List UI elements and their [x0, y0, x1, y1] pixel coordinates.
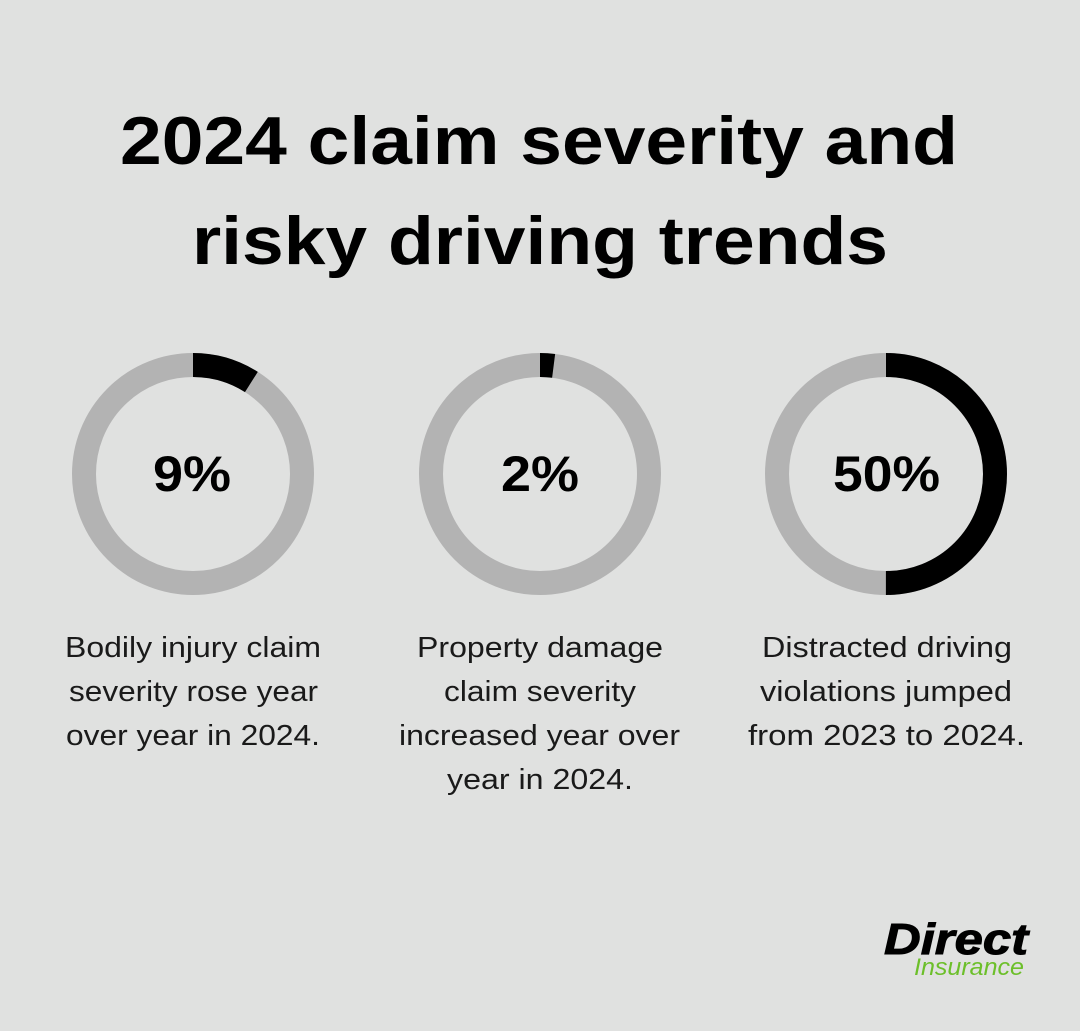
caption: violations jumped: [760, 676, 1012, 708]
caption: claim severity: [444, 676, 637, 708]
caption: [748, 632, 1025, 752]
title: [120, 103, 958, 279]
donut: 9%: 9%: [153, 446, 231, 502]
donut: 9%: [84, 365, 302, 583]
caption: over year in 2024.: [66, 720, 320, 752]
panel: distracted driving: [748, 365, 1025, 752]
panel: bodily injury: [65, 365, 321, 752]
title: risky driving trends: [192, 203, 888, 279]
donut: 50%: 50%: [833, 446, 940, 502]
donut: 2%: [431, 365, 649, 583]
logo: Direct Insurance: Direct: [884, 915, 1031, 964]
logo: Direct Insurance: Insurance: [914, 954, 1024, 981]
caption: Bodily injury claim: [65, 632, 321, 664]
caption: Distracted driving: [762, 632, 1012, 664]
caption: [65, 632, 321, 752]
donut: 2%: 2%: [501, 446, 579, 502]
caption: increased year over: [399, 720, 680, 752]
panel: property damage: [399, 365, 680, 796]
donut: 50%: [777, 365, 995, 583]
title: 2024 claim severity and: [120, 103, 958, 179]
logo: Direct Insurance: [884, 915, 1031, 981]
caption: year in 2024.: [447, 764, 633, 796]
caption: from 2023 to 2024.: [748, 720, 1025, 752]
caption: [399, 632, 680, 796]
caption: Property damage: [417, 632, 663, 664]
caption: severity rose year: [69, 676, 318, 708]
